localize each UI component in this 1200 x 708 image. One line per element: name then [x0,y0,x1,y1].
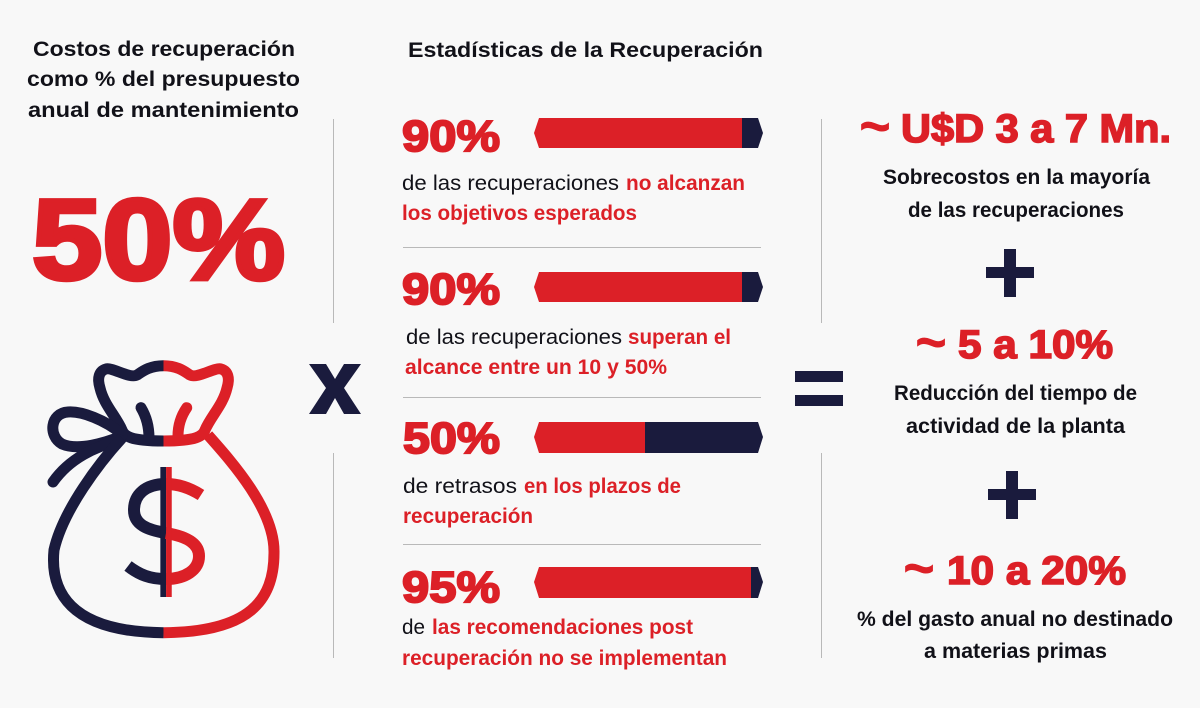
stat row 1: no alcanzan [626,172,745,195]
heading: costos de recuperación: anual de mantenimiento [28,99,299,122]
stat row 2: superan el [628,326,731,349]
result: reducción [894,308,1137,438]
icon: multiply [309,364,361,414]
bar 90% [534,272,763,302]
result: gasto: ~ [903,534,935,603]
stat row 2: de las recuperaciones [406,326,622,349]
stat row 3: de retrasos [403,475,517,498]
stat row 1 [402,112,763,225]
result: sobrecostos [859,92,1171,222]
result: gasto: % del gasto anual no destinado [857,608,1173,631]
heading: costos de recuperación: como % del presupuesto [27,68,300,91]
result: gasto [857,534,1173,663]
stat row 1: los objetivos esperados [402,202,637,225]
stat row 2 [402,265,763,379]
stat row 3: recuperación [403,505,533,528]
heading: costos de recuperación: Costos de recuperación [33,38,295,61]
bar 50% [534,422,763,453]
stat row 4: las recomendaciones post [432,616,693,639]
stat row 3 [403,414,763,528]
result: sobrecostos: de las recuperaciones [908,199,1124,222]
big stat: 50%: 50% [32,177,285,304]
result: reducción: ~ [915,308,947,377]
icon: plus [988,471,1036,519]
stat row 2: 90% [402,265,500,314]
heading: estadísticas: Estadísticas de la Recuperación [408,39,763,62]
result: reducción: 5 a 10% [958,323,1113,367]
bar 90% [534,118,763,148]
result: sobrecostos: ~ [859,92,891,161]
stat row 4: de [402,616,425,639]
icon: equals [795,371,843,406]
stat row 4: recuperación no se implementan [402,647,727,670]
heading: costos de recuperación [27,38,300,122]
stat row 2: alcance entre un 10 y 50% [405,356,667,379]
result: sobrecostos: U$D 3 a 7 Mn. [901,107,1171,151]
stat row 1: de las recuperaciones [402,172,619,195]
stat row 1: 90% [402,112,500,161]
stat row 3: en los plazos de [524,475,681,498]
bar 95% [534,567,763,598]
icon: plus [986,249,1034,297]
icon: money bag [53,366,274,633]
result: sobrecostos: Sobrecostos en la mayoría [883,166,1150,189]
result: gasto: a materias primas [924,640,1107,663]
stat row 3: 50% [403,414,500,463]
result: reducción: Reducción del tiempo de [894,382,1137,405]
result: gasto: 10 a 20% [947,549,1126,593]
result: reducción: actividad de la planta [906,415,1125,438]
stat row 4: 95% [402,563,500,612]
stat row 4 [402,563,763,670]
